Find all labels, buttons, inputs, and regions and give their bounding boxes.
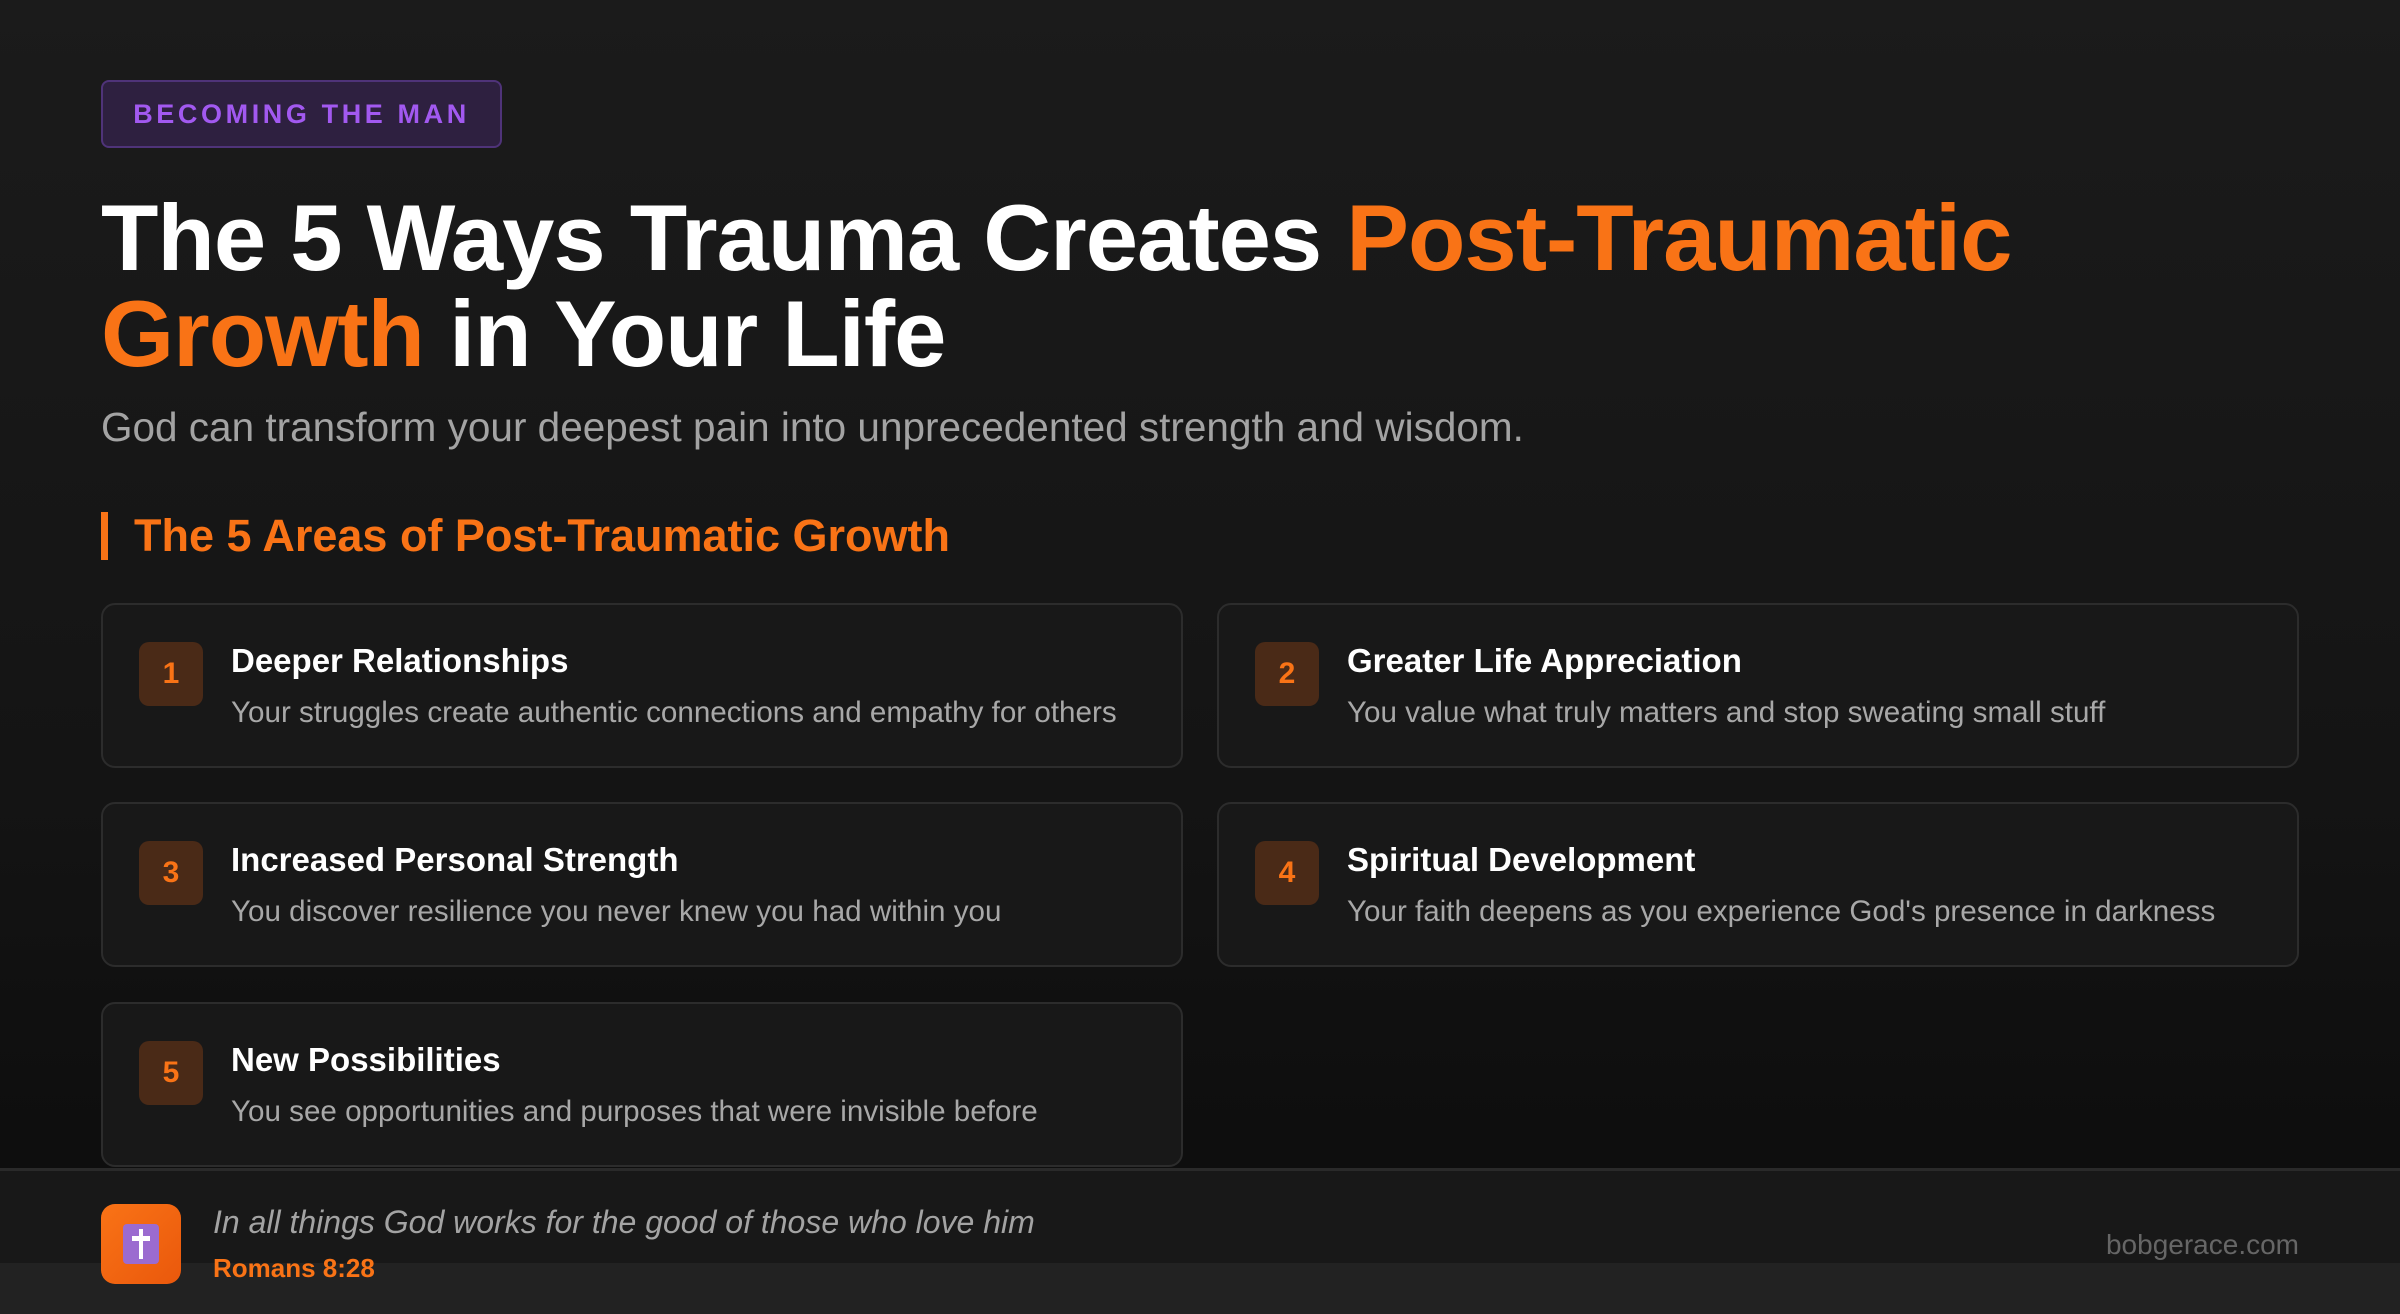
card 5 title: New Possibilities	[231, 1041, 501, 1078]
card 1 text: Your struggles create authentic connections and empathy for others	[231, 696, 1117, 729]
number 1	[139, 642, 203, 706]
card 2 text: You value what truly matters and stop sweating small stuff	[1347, 696, 2105, 729]
number 5	[139, 1041, 203, 1105]
card 3	[101, 802, 1183, 967]
footer	[0, 1168, 2400, 1314]
section heading: The 5 Areas of Post-Traumatic Growth	[134, 510, 950, 561]
title: The 5 Ways Trauma Creates Post-Traumatic	[101, 185, 2011, 290]
number 4	[1255, 841, 1319, 905]
card 5	[101, 1002, 1183, 1167]
title: Growth in Your Life	[101, 281, 945, 386]
card 1	[101, 603, 1183, 768]
website: bobgerace.com	[2106, 1229, 2299, 1260]
number 5: 5	[163, 1056, 179, 1089]
reference: Romans 8:28	[213, 1253, 375, 1283]
card 4	[1217, 802, 2299, 967]
title	[101, 185, 2011, 386]
number 1: 1	[163, 657, 179, 690]
card 3 title: Increased Personal Strength	[231, 841, 678, 878]
card 1 title: Deeper Relationships	[231, 642, 568, 679]
card 5 text: You see opportunities and purposes that were invisible before	[231, 1095, 1038, 1128]
card 2 title: Greater Life Appreciation	[1347, 642, 1742, 679]
number 2: 2	[1279, 657, 1295, 690]
quote: In all things God works for the good of those who love him	[213, 1204, 1035, 1240]
card 2	[1217, 603, 2299, 768]
badge: BECOMING THE MAN	[133, 98, 470, 128]
number 3: 3	[163, 856, 179, 889]
number 2	[1255, 642, 1319, 706]
icon: cross	[101, 1204, 181, 1284]
badge	[101, 80, 502, 148]
subtitle: God can transform your deepest pain into unprecedented strength and wisdom.	[101, 404, 1524, 450]
card 4 text: Your faith deepens as you experience God's presence in darkness	[1347, 895, 2215, 928]
card 4 title: Spiritual Development	[1347, 841, 1695, 878]
number 4: 4	[1279, 856, 1295, 889]
card 3 text: You discover resilience you never knew you had within you	[231, 895, 1001, 928]
number 3	[139, 841, 203, 905]
